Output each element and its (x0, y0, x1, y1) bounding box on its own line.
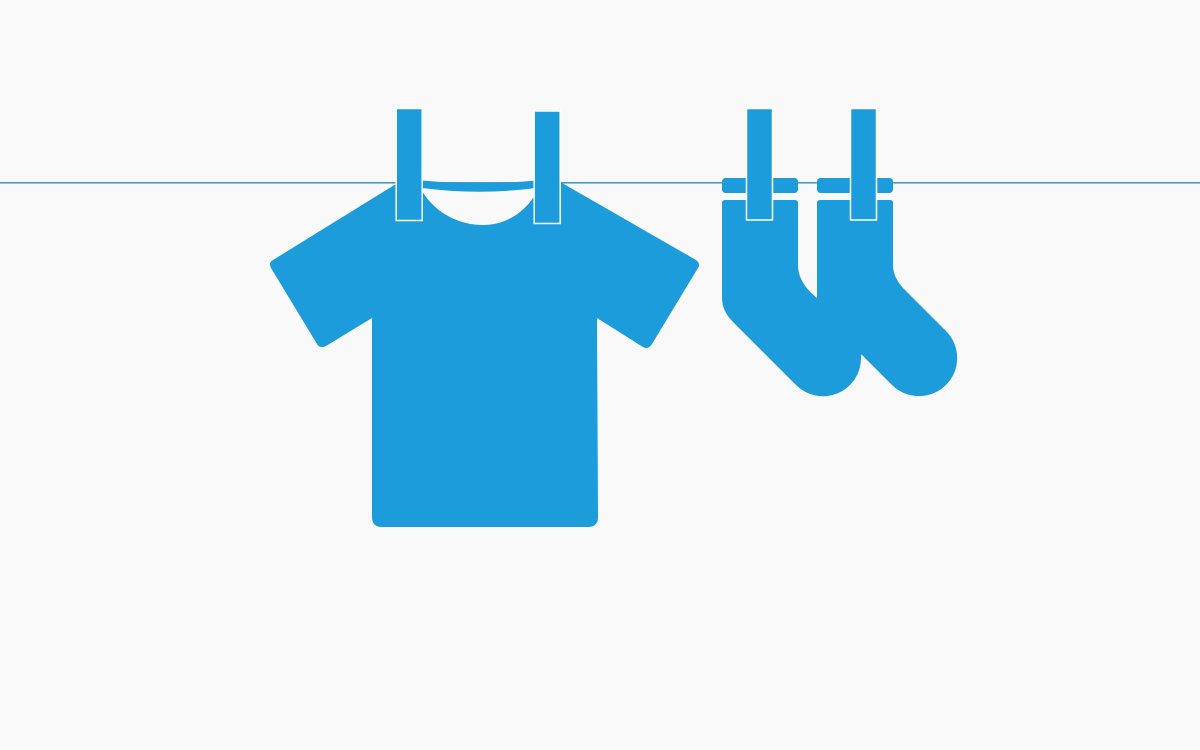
clothesline (0, 182, 1200, 184)
clothespin: right sock (850, 108, 876, 220)
clothespin: left sock (746, 108, 772, 220)
t-shirt body (270, 183, 699, 527)
clothespin: shirt left (396, 108, 422, 220)
clothespin: shirt right (534, 111, 560, 224)
icon: socks (722, 178, 957, 396)
right sock (817, 200, 957, 396)
t-shirt collar (422, 180, 536, 192)
left sock (722, 200, 861, 396)
clothespins (396, 108, 876, 224)
right sock band (817, 178, 893, 193)
icon: t-shirt (270, 180, 699, 527)
left sock band (722, 178, 798, 193)
